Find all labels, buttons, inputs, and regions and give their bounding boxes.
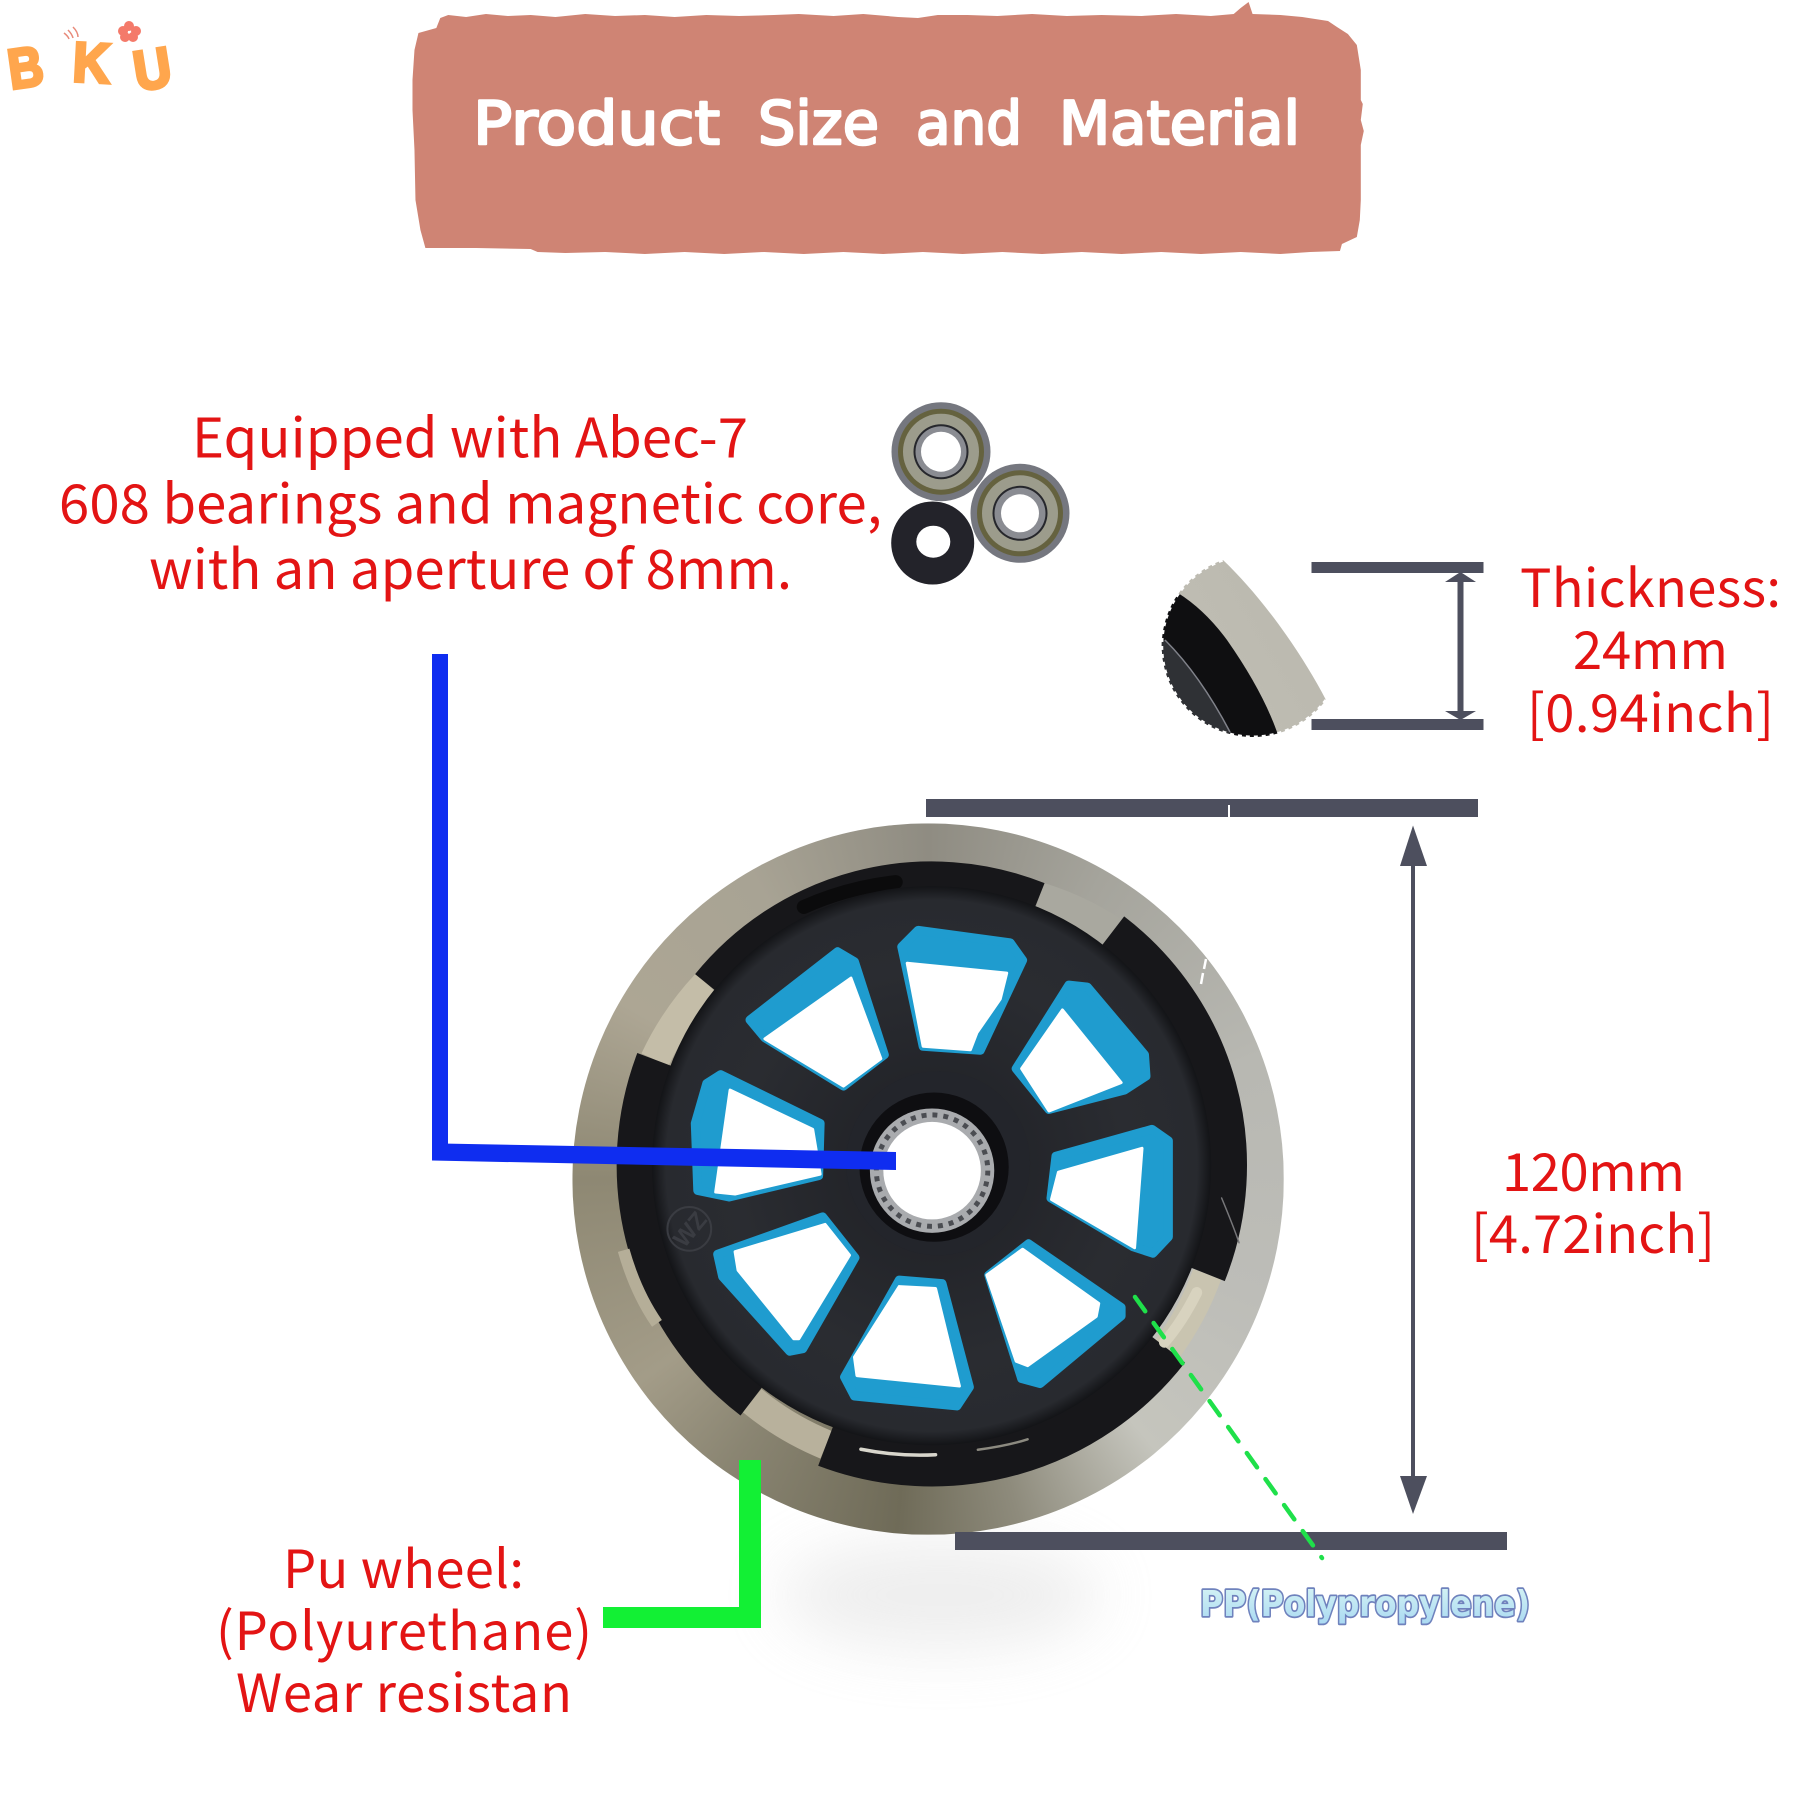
tan sliver over left segment xyxy=(624,1250,657,1323)
title text: and xyxy=(916,89,1022,159)
highlights on rim xyxy=(861,1198,1239,1455)
diameter arrow xyxy=(1400,826,1427,1514)
logo: BKU: U xyxy=(129,36,176,103)
diameter text: 120mm xyxy=(1502,1131,1685,1207)
hub disk xyxy=(652,886,1211,1445)
logo: BKU xyxy=(4,21,176,103)
Pu wheel text: Pu wheel: xyxy=(283,1528,524,1604)
blue pointer line xyxy=(432,654,896,1170)
Pu wheel text: Wear resistan xyxy=(236,1652,572,1728)
logo: BKU: K xyxy=(71,31,112,95)
green dashed leader xyxy=(1135,1297,1322,1558)
bearing text: Equipped with Abec-7 xyxy=(192,394,748,474)
white dashes on wheel xyxy=(1201,959,1206,984)
wheel bottom dimension bar xyxy=(955,1532,1507,1550)
Pu wheel text xyxy=(216,1528,592,1728)
title banner xyxy=(412,2,1364,254)
icon: bearings xyxy=(891,402,1070,584)
title text xyxy=(473,89,1300,159)
Pu wheel text: (Polyurethane) xyxy=(216,1590,592,1666)
wheel shadow xyxy=(780,1540,1100,1650)
green pointer line xyxy=(603,1460,761,1628)
PP label: PP(Polypropylene) xyxy=(1200,1584,1530,1625)
thickness dimension xyxy=(1312,562,1484,730)
bearing text: 608 bearings and magnetic core, xyxy=(59,460,882,540)
tyre black segments xyxy=(636,876,1228,1464)
wheel xyxy=(572,823,1284,1535)
wheel top dimension bar xyxy=(926,799,1478,817)
bearing text: with an aperture of 8mm. xyxy=(149,526,792,605)
title text: Material xyxy=(1059,89,1300,159)
thickness text: 24mm xyxy=(1573,609,1728,685)
diameter text xyxy=(1471,1131,1715,1269)
bearing text xyxy=(59,394,882,605)
logo: BKU: B xyxy=(4,35,47,102)
bearing hub xyxy=(846,1071,1030,1255)
thickness text: [0.94inch] xyxy=(1527,672,1774,748)
diameter text: [4.72inch] xyxy=(1471,1193,1715,1269)
thickness crop of wheel xyxy=(1162,560,1326,737)
spoke windows xyxy=(695,930,1168,1406)
title text: Size xyxy=(758,89,879,159)
title text: Product xyxy=(473,89,720,159)
thickness text: Thickness: xyxy=(1520,547,1781,623)
thickness text xyxy=(1520,547,1781,748)
disk logo mark: WZ xyxy=(668,1207,713,1253)
